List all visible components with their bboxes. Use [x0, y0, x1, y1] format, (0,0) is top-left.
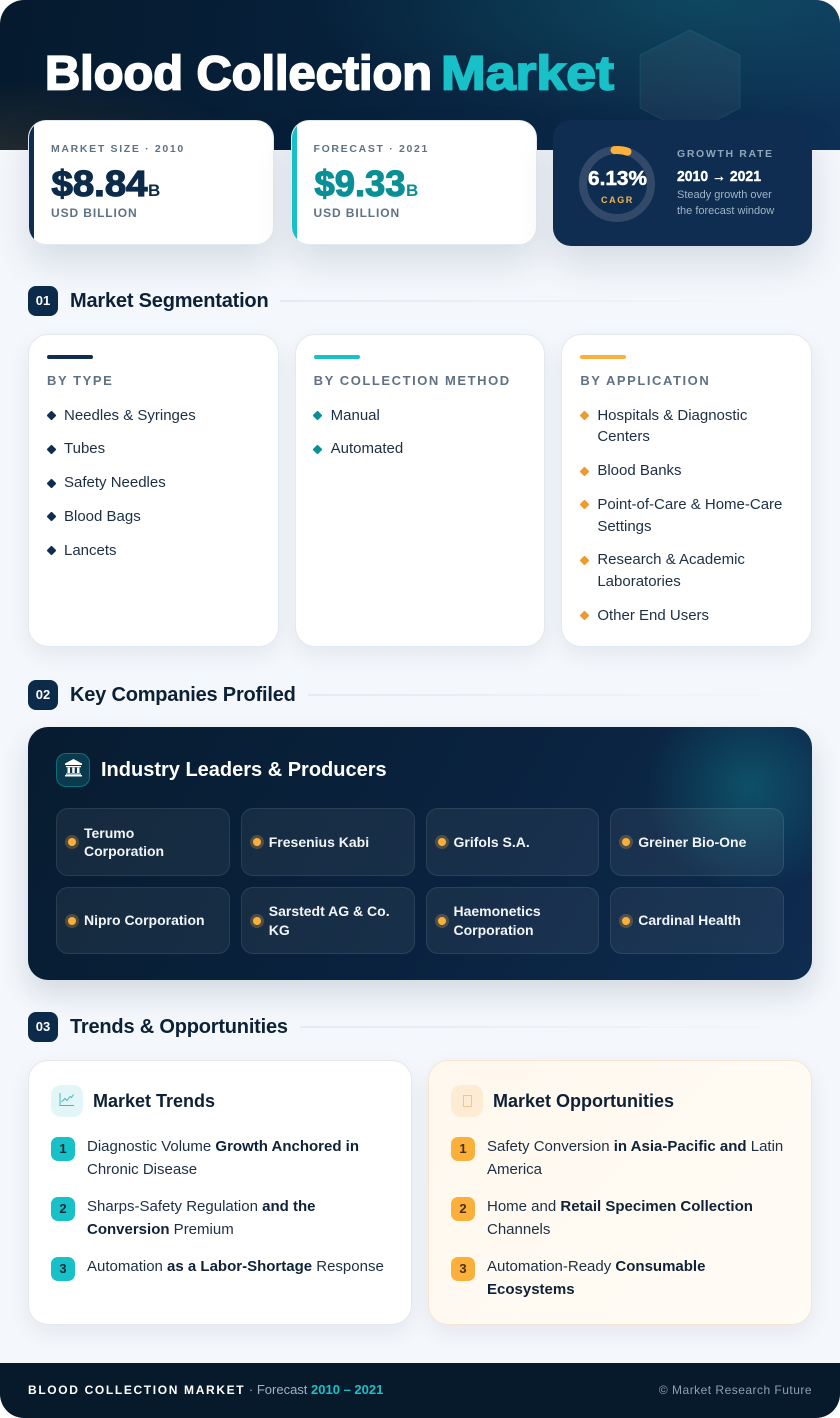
trend 2: 2	[59, 1201, 67, 1216]
trend 3: Automation as a Labor-Shortage Response	[87, 1258, 384, 1275]
company grid: Greiner Bio-One	[638, 834, 746, 850]
icon: institution	[56, 753, 90, 787]
value: $8.84B: B	[148, 181, 160, 200]
company grid: Nipro Corporation	[84, 912, 205, 928]
list: type items	[46, 406, 196, 558]
trend 1: 1	[59, 1141, 67, 1156]
trend 1: Diagnostic Volume Growth Anchored in Chronic Disease	[87, 1138, 359, 1178]
icon: line chart	[51, 1085, 83, 1117]
growth rate text: GROWTH RATE	[677, 148, 774, 160]
growth rate text: the forecast window	[677, 205, 774, 217]
stat card: market size 2010	[28, 120, 274, 245]
growth rate text: 2010 → 2021	[677, 168, 761, 185]
panel: market opportunities	[428, 1060, 812, 1325]
panel: industry leaders	[28, 727, 812, 980]
trend 2: Sharps-Safety Regulation and the Conversion Premium	[87, 1198, 315, 1238]
title: Market	[441, 48, 614, 100]
icon: opportunity placeholder	[451, 1085, 483, 1117]
chart: CAGR progress ring	[579, 146, 655, 222]
list: application items: Other End Users	[597, 607, 709, 624]
company grid	[56, 808, 784, 954]
title	[45, 48, 614, 100]
stat card: forecast 2021: FORECAST · 2021	[314, 143, 429, 155]
footer credit: © Market Research Future	[659, 1383, 812, 1397]
panel: market trends	[28, 1060, 412, 1325]
list: method items	[312, 406, 403, 457]
panel: by application	[561, 334, 812, 647]
growth rate text: Steady growth over	[677, 189, 772, 201]
company grid: Grifols S.A.	[454, 834, 530, 850]
list: application items	[580, 406, 782, 624]
section heading: key companies: Key Companies Profiled	[70, 684, 296, 706]
company grid: Sarstedt AG & Co. KG	[269, 903, 390, 938]
section heading: market segmentation: Market Segmentation	[70, 290, 268, 312]
opportunity 2: 2	[459, 1201, 467, 1216]
value: $9.33B: $9.33	[314, 163, 405, 204]
opportunity 2: Home and Retail Specimen Collection Channels	[487, 1198, 753, 1238]
title: Blood Collection	[45, 48, 432, 100]
panel: by type	[28, 334, 279, 647]
list: application items: Research & Academic Laboratories	[597, 551, 745, 590]
section heading: trends and opportunities: Trends & Opportunities	[70, 1016, 288, 1038]
opportunity 3: 3	[459, 1261, 467, 1276]
list: type items: Safety Needles	[64, 474, 166, 491]
panel: by application: BY APPLICATION	[580, 373, 710, 388]
list: type items: Tubes	[64, 440, 105, 457]
list: type items: Blood Bags	[64, 508, 141, 525]
icon: hexagon watermark	[640, 30, 740, 120]
list: type items: Lancets	[64, 542, 117, 558]
company grid: Haemonetics Corporation	[454, 903, 541, 938]
company grid: Fresenius Kabi	[269, 834, 369, 850]
opportunity 1: Safety Conversion in Asia-Pacific and Latin America	[487, 1138, 783, 1178]
trend 3	[51, 1257, 384, 1281]
section heading: market segmentation: 01	[36, 293, 50, 308]
growth rate text	[677, 148, 774, 217]
list: type items: Needles & Syringes	[64, 406, 196, 424]
stat card: CAGR growth rate	[553, 120, 812, 246]
section heading: market segmentation	[28, 286, 506, 316]
value: $8.84B: $8.84	[52, 163, 148, 204]
chart: CAGR progress ring: 6.13%	[588, 168, 647, 190]
section heading: key companies	[28, 680, 520, 710]
company grid: Cardinal Health	[638, 912, 741, 928]
panel: market trends: Market Trends	[93, 1091, 215, 1111]
stat card: forecast 2021	[290, 120, 536, 245]
stat card: market size 2010: USD BILLION	[51, 206, 138, 220]
section heading: key companies: 02	[36, 687, 50, 702]
list: method items: Manual	[331, 406, 380, 424]
section heading: trends and opportunities	[28, 1012, 518, 1042]
panel: by type: BY TYPE	[47, 373, 113, 388]
value: $9.33B: B	[406, 181, 418, 200]
header band	[0, 0, 840, 150]
list: method items: Automated	[331, 440, 403, 457]
panel: by collection method	[295, 334, 545, 647]
footer	[0, 1363, 840, 1418]
trend 3: 3	[59, 1261, 67, 1276]
list: application items: Point-of-Care & Home-Care Settings	[597, 496, 782, 534]
stat card: forecast 2021: USD BILLION	[314, 206, 400, 220]
heading: industry leaders: Industry Leaders & Producers	[101, 759, 387, 781]
section heading: trends and opportunities: 03	[36, 1019, 50, 1034]
opportunity 1: 1	[459, 1141, 467, 1156]
panel: by collection method: BY COLLECTION METHOD	[314, 373, 511, 388]
panel: market opportunities: Market Opportunities	[493, 1091, 674, 1111]
list: application items: Hospitals & Diagnostic Centers	[597, 406, 747, 445]
stat card: market size 2010: MARKET SIZE · 2010	[51, 143, 185, 155]
list: application items: Blood Banks	[597, 462, 682, 479]
footer title: BLOOD COLLECTION MARKET · Forecast 2010 – 2021	[28, 1382, 383, 1397]
opportunity 3: Automation-Ready Consumable Ecosystems	[487, 1258, 705, 1298]
chart: CAGR progress ring: CAGR	[601, 195, 634, 205]
company grid: Terumo Corporation	[84, 824, 164, 859]
